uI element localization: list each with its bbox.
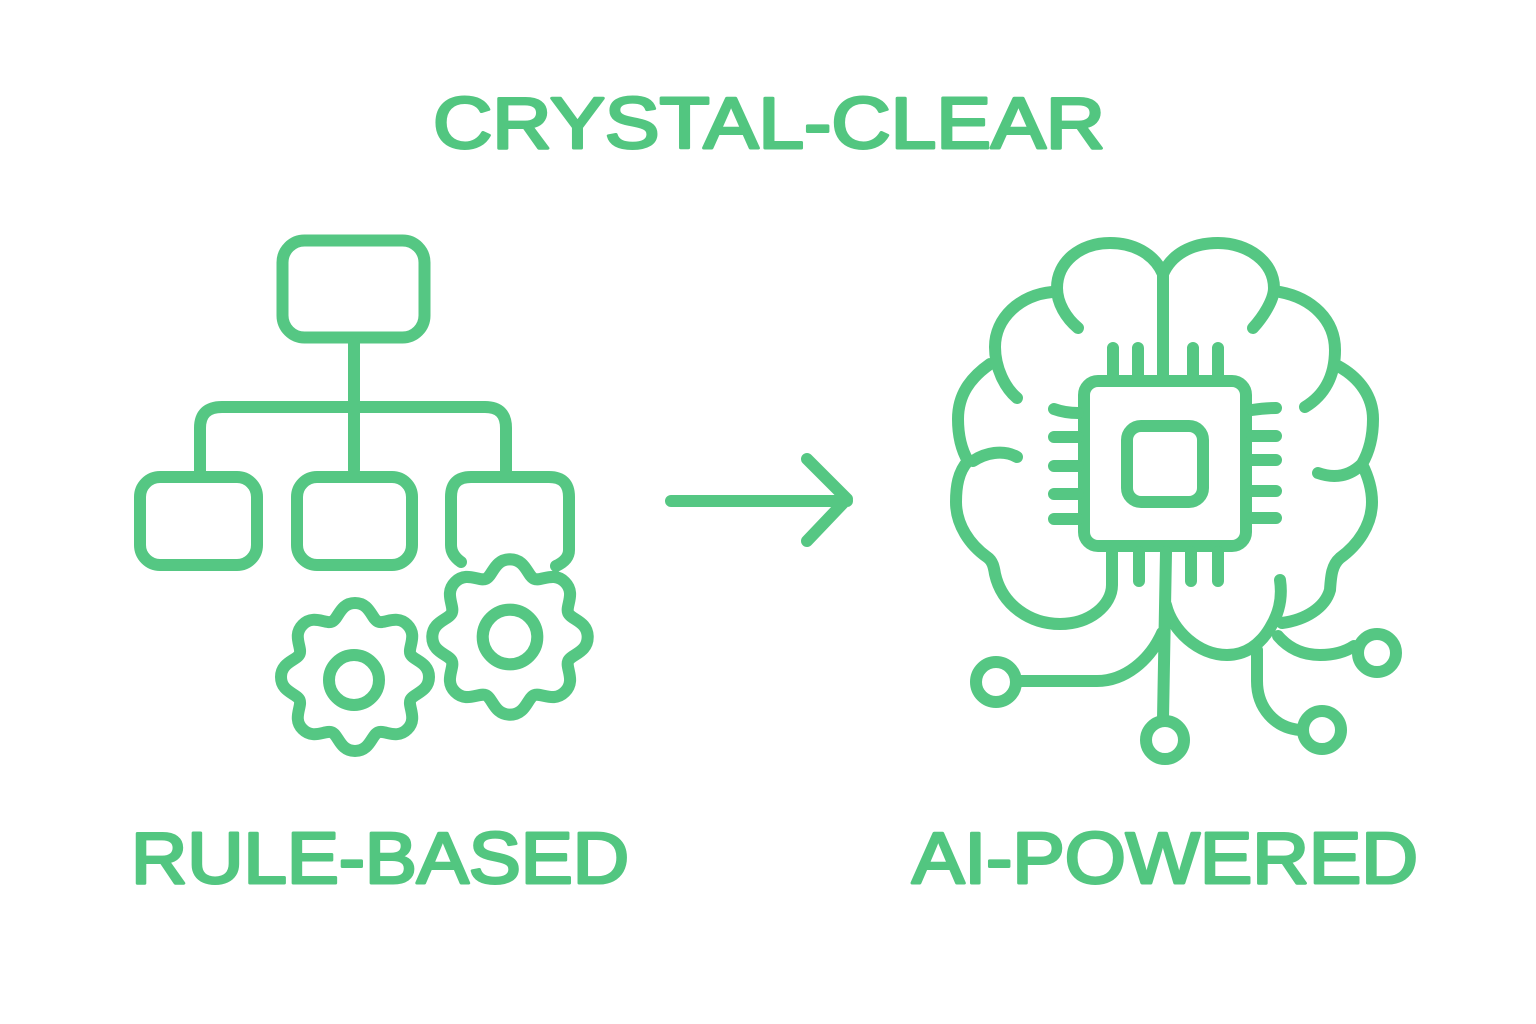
flowchart middle box [297, 477, 412, 565]
circuit traces [1020, 552, 1354, 730]
flowchart connectors [200, 343, 506, 472]
chip core [1127, 426, 1203, 502]
flowchart right box [451, 477, 569, 566]
icon: rule-based flowchart with gears [140, 240, 588, 751]
chip pins [1054, 348, 1276, 581]
arrow [671, 459, 847, 541]
brain outline [956, 243, 1373, 655]
circuit node: left [976, 662, 1016, 702]
flowchart left box [140, 477, 257, 565]
flowchart top box [282, 240, 424, 338]
icon: small gear [281, 603, 429, 751]
title: CRYSTAL-CLEAR [433, 84, 1105, 164]
label: AI-powered: AI-POWERED [912, 819, 1418, 899]
circuit node: lower right [1303, 711, 1341, 749]
icon: large gear [432, 559, 588, 715]
label: rule-based: RULE-BASED [131, 819, 629, 899]
chip body [1084, 381, 1246, 546]
circuit node: right [1358, 634, 1396, 672]
circuit node: bottom [1146, 721, 1184, 759]
icon: AI brain with chip [956, 243, 1396, 759]
